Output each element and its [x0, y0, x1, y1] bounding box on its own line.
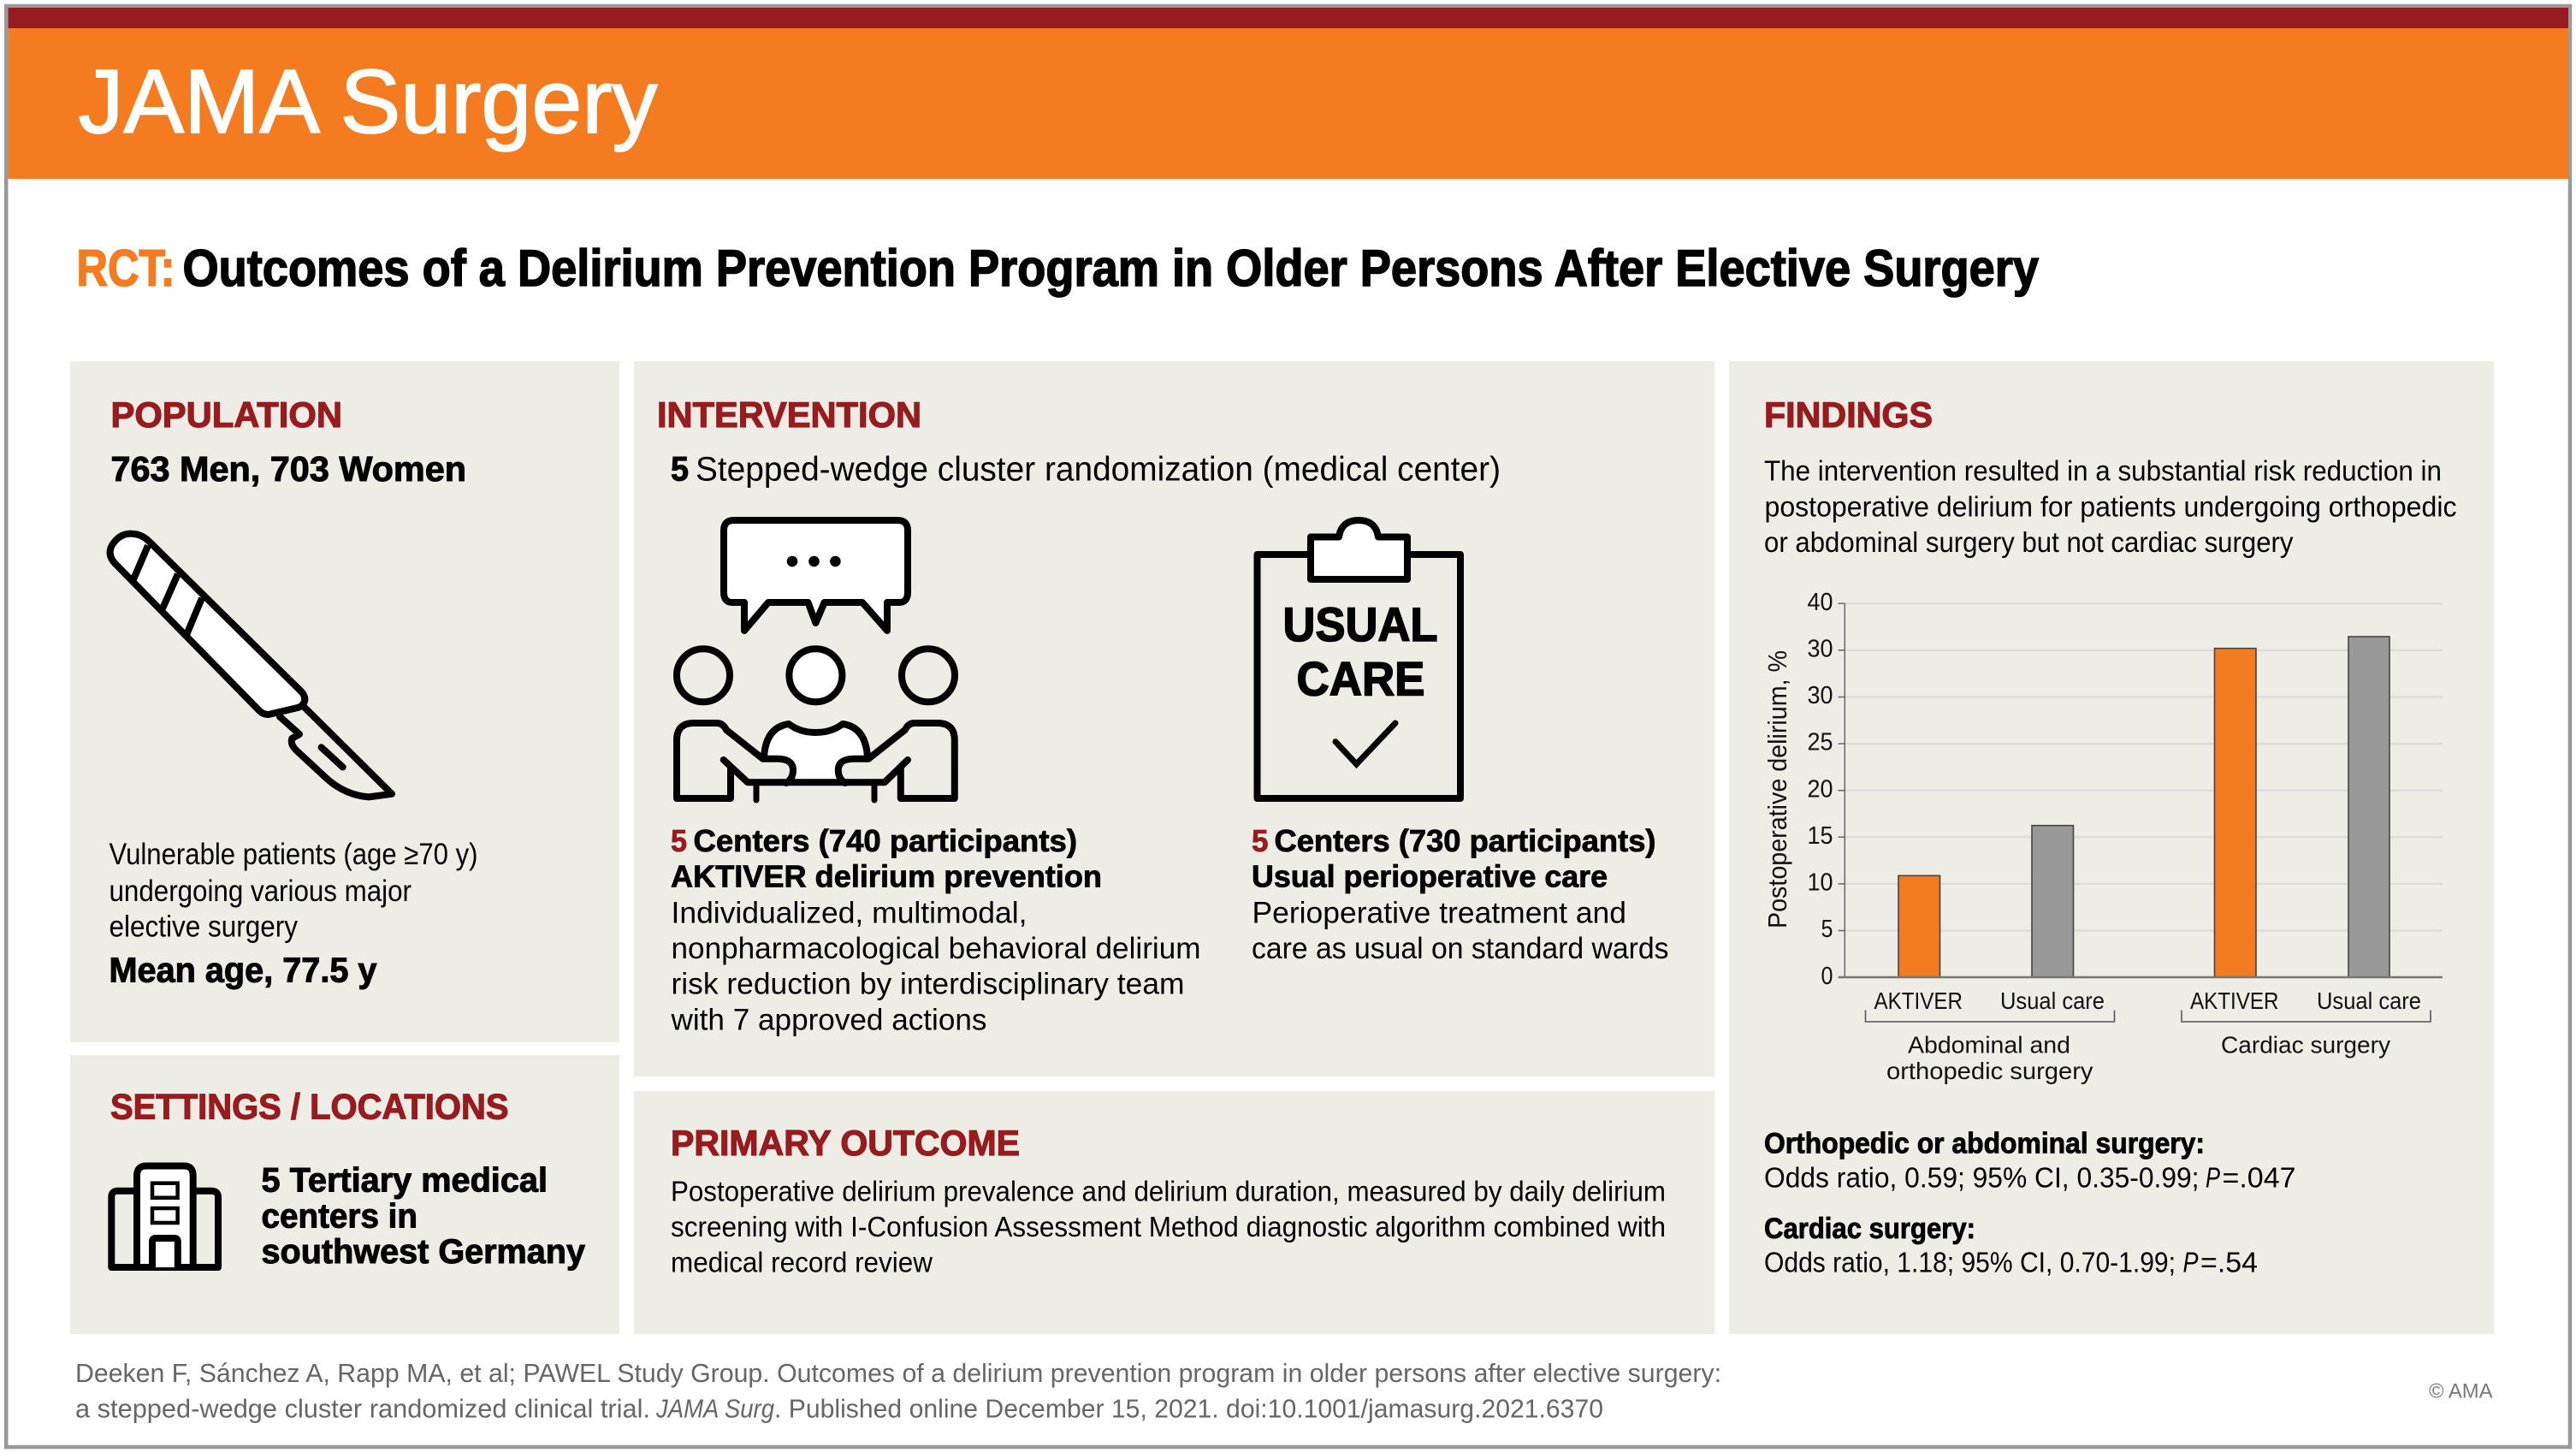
journal header banner: [9, 8, 2568, 179]
journal name: JAMA Surgery: [79, 51, 657, 152]
AKTIVER group description: nonpharmacological behavioral delirium: [671, 932, 1201, 965]
primary outcome text: [671, 1175, 1666, 1278]
sex counts: 763 Men, 703 Women: [111, 449, 466, 489]
y axis tick labels: 40: [1807, 589, 1833, 616]
settings text: southwest Germany: [262, 1233, 586, 1271]
AKTIVER group description: with 7 approved actions: [670, 1003, 987, 1036]
y axis tick labels: 30: [1807, 635, 1833, 662]
citation footer: . Published online December 15, 2021. doi:10.1001/jamasurg.2021.6370: [774, 1394, 1603, 1424]
randomization line: 5: [671, 451, 689, 489]
population description: Vulnerable patients (age ≥70 y): [110, 838, 477, 871]
y axis tick labels: 10: [1807, 869, 1833, 897]
icon: hospital building: [111, 1165, 218, 1267]
odds ratio: cardiac surgery: Odds ratio, 1.18; 95% CI, 0.70-1.99;: [1764, 1247, 2176, 1278]
icon: interdisciplinary team meeting: [677, 520, 955, 800]
x axis category labels: Usual care: [2000, 987, 2105, 1014]
panel: population: [70, 361, 619, 1042]
randomization line: Stepped-wedge cluster randomization (medical center): [696, 451, 1501, 489]
odds ratio: cardiac surgery: [1764, 1213, 2258, 1278]
y axis tick labels: 25: [1807, 729, 1833, 756]
heading: population: POPULATION: [111, 394, 342, 435]
usual care group description: [1252, 823, 1668, 965]
findings summary: postoperative delirium for patients undergoing orthopedic: [1764, 490, 2457, 522]
heading: intervention: INTERVENTION: [657, 394, 921, 435]
primary outcome text: Postoperative delirium prevalence and delirium duration, measured by daily delirium: [671, 1175, 1666, 1207]
usual care group description: Usual perioperative care: [1252, 859, 1608, 894]
population description: elective surgery: [110, 910, 298, 943]
bars: AKTIVER and usual care: [1898, 637, 2389, 977]
icon: usual care clipboard: USUAL: [1283, 597, 1437, 651]
usual care group description: Perioperative treatment and: [1252, 896, 1626, 929]
heading: settings: SETTINGS / LOCATIONS: [110, 1087, 508, 1126]
x axis category labels: AKTIVER: [2190, 987, 2279, 1014]
odds ratio: orthopedic or abdominal surgery: =.047: [2223, 1161, 2296, 1193]
odds ratio: orthopedic or abdominal surgery: Orthopedic or abdominal surgery:: [1764, 1128, 2205, 1160]
settings text: [262, 1162, 586, 1271]
x axis category labels: Usual care: [2317, 987, 2421, 1014]
panel: primary outcome: [634, 1091, 1714, 1334]
title: RCT:: [77, 240, 175, 297]
odds ratio: cardiac surgery: =.54: [2200, 1247, 2258, 1278]
bar chart: postoperative delirium: [1762, 589, 2443, 1084]
y axis tick labels: 0: [1821, 963, 1833, 990]
x axis group labels: [1886, 1032, 2390, 1084]
usual care group description: Centers (730 participants): [1275, 823, 1656, 858]
usual care group description: 5: [1252, 823, 1268, 858]
panel: intervention: [634, 361, 1714, 1076]
findings summary: or abdominal surgery but not cardiac surgery: [1764, 526, 2294, 558]
x axis category labels: AKTIVER: [1874, 987, 1963, 1014]
odds ratio: cardiac surgery: P: [2183, 1247, 2199, 1278]
y axis tick labels: 30: [1807, 682, 1833, 709]
icon: usual care clipboard: CARE: [1297, 652, 1425, 706]
mean age: Mean age, 77.5 y: [110, 950, 377, 989]
odds ratio: orthopedic or abdominal surgery: Odds ratio, 0.59; 95% CI, 0.35-0.99;: [1764, 1161, 2199, 1193]
y axis tick labels: 5: [1821, 916, 1833, 943]
primary outcome text: medical record review: [671, 1247, 933, 1278]
findings summary: [1764, 455, 2457, 558]
y axis tick labels: 20: [1807, 775, 1833, 803]
AKTIVER group description: AKTIVER delirium prevention: [671, 859, 1102, 894]
odds ratio: orthopedic or abdominal surgery: P: [2206, 1161, 2220, 1193]
icon: usual care clipboard: [1258, 520, 1460, 798]
population description: [110, 838, 477, 943]
citation footer: [75, 1358, 1721, 1424]
citation footer: a stepped-wedge cluster randomized clinical trial.: [75, 1394, 650, 1424]
y axis tick labels: 15: [1807, 822, 1833, 850]
icon: scalpel: [110, 534, 392, 797]
citation footer: JAMA Surg: [655, 1394, 774, 1424]
AKTIVER group description: Individualized, multimodal,: [671, 896, 1027, 929]
heading: findings: FINDINGS: [1764, 394, 1933, 435]
AKTIVER group description: [670, 823, 1201, 1036]
odds ratio: orthopedic or abdominal surgery: [1764, 1128, 2296, 1193]
AKTIVER group description: risk reduction by interdisciplinary team: [671, 968, 1184, 1001]
settings text: centers in: [262, 1197, 417, 1235]
x axis group labels: Cardiac surgery: [2221, 1032, 2390, 1058]
population description: undergoing various major: [110, 875, 412, 908]
citation footer: Deeken F, Sánchez A, Rapp MA, et al; PAWEL Study Group. Outcomes of a delirium prevention program in older persons after elective surgery:: [75, 1358, 1721, 1388]
y axis title: Postoperative delirium, %: [1762, 650, 1792, 928]
AKTIVER group description: 5: [671, 823, 687, 858]
primary outcome text: screening with I-Confusion Assessment Method diagnostic algorithm combined with: [671, 1211, 1666, 1242]
title: Outcomes of a Delirium Prevention Program in Older Persons After Elective Surgery: [183, 240, 2040, 297]
copyright: © AMA: [2429, 1379, 2493, 1403]
x axis group labels: orthopedic surgery: [1886, 1058, 2093, 1084]
usual care group description: care as usual on standard wards: [1252, 932, 1668, 965]
findings summary: The intervention resulted in a substantial risk reduction in: [1764, 455, 2442, 487]
x axis category labels: [1874, 987, 2421, 1014]
settings text: 5 Tertiary medical: [262, 1162, 548, 1200]
x axis group labels: Abdominal and: [1908, 1032, 2070, 1058]
y axis tick labels: [1807, 589, 1833, 990]
odds ratio: cardiac surgery: Cardiac surgery:: [1764, 1213, 1975, 1245]
AKTIVER group description: Centers (740 participants): [693, 823, 1077, 858]
panel: findings: [1729, 361, 2495, 1334]
heading: primary outcome: PRIMARY OUTCOME: [671, 1123, 1020, 1163]
panel: settings and locations: [70, 1055, 619, 1334]
